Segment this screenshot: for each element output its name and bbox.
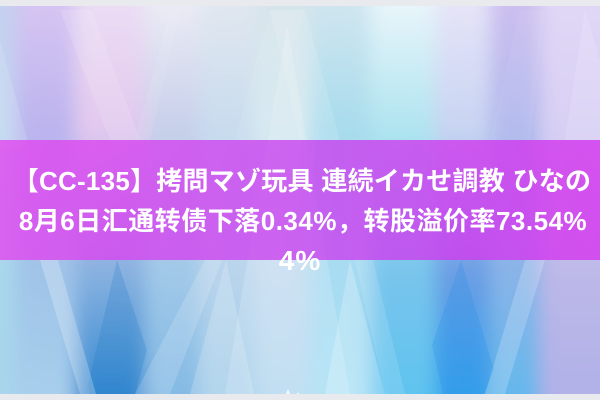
magenta title band	[0, 140, 600, 260]
title: 8月6日汇通转债下落0.34%，转股溢价率73.54%	[19, 206, 587, 236]
icon: small sparkle marks	[286, 389, 300, 396]
title: 4%	[279, 245, 321, 276]
bottom edge strip	[0, 394, 600, 400]
title	[13, 166, 591, 276]
top edge strip	[0, 0, 600, 6]
title: 【CC-135】拷問マゾ玩具 連続イカせ調教 ひなの	[13, 166, 591, 196]
